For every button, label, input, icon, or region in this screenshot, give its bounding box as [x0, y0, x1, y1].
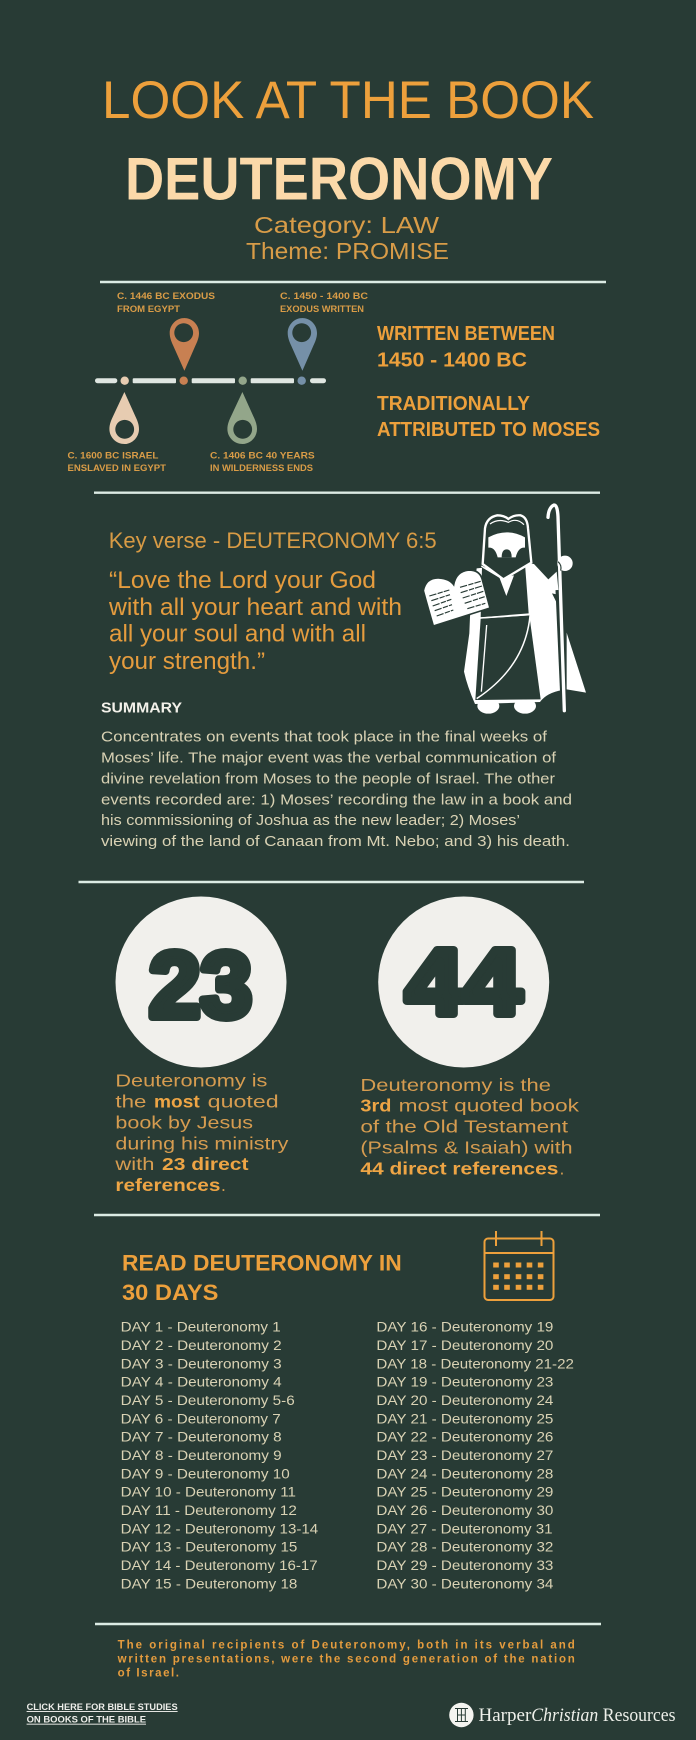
timeline dots	[120, 376, 306, 385]
text block: summary: Concentrates on events that took place in the final weeks of	[101, 730, 548, 746]
list: days 1 to 15: DAY 1 - Deuteronomy 1	[121, 1320, 281, 1335]
text block: authorship: WRITTEN BETWEEN	[377, 323, 555, 345]
label: 1406 BC	[210, 451, 315, 474]
list: days 16 to 30: DAY 24 - Deuteronomy 28	[376, 1466, 553, 1481]
list: days 16 to 30: DAY 26 - Deuteronomy 30	[376, 1503, 553, 1518]
text block: verse quote	[108, 567, 402, 675]
list: days 16 to 30: DAY 28 - Deuteronomy 32	[376, 1540, 553, 1555]
staff	[558, 590, 563, 695]
text block: 23 references: references	[115, 1175, 221, 1195]
text block: 44 references: 3rd	[360, 1096, 391, 1116]
label: 1446 BC: C. 1446 BC EXODUS	[117, 291, 215, 302]
text block: 23 references: Deuteronomy is	[115, 1071, 268, 1091]
list: days 16 to 30: DAY 21 - Deuteronomy 25	[376, 1411, 553, 1426]
subtitle: category and theme: Category: LAW	[254, 212, 440, 238]
text block: summary: viewing of the land of Canaan from Mt. Nebo; and 3) his death.	[101, 834, 570, 850]
text block: 23 references: 23 direct	[162, 1154, 249, 1174]
list: days 1 to 15: DAY 6 - Deuteronomy 7	[121, 1411, 281, 1426]
wordmark: Harper	[478, 1705, 532, 1726]
list: days 1 to 15: DAY 5 - Deuteronomy 5-6	[121, 1393, 295, 1408]
list: days 16 to 30: DAY 27 - Deuteronomy 31	[376, 1521, 553, 1536]
list: days 1 to 15: DAY 14 - Deuteronomy 16-17	[121, 1558, 318, 1573]
text block: 44 references: (Psalms & Isaiah) with	[360, 1137, 573, 1157]
text block: 44 references: most quoted book	[399, 1096, 579, 1116]
text block: 23 references: most	[154, 1092, 200, 1112]
panel: timeline	[68, 291, 368, 474]
head	[483, 515, 531, 579]
text block: summary	[101, 730, 572, 850]
list: days 1 to 15: DAY 15 - Deuteronomy 18	[121, 1576, 297, 1591]
heading: key verse: Key verse - DEUTERONOMY 6:5	[109, 528, 437, 553]
list: days 1 to 15: DAY 11 - Deuteronomy 12	[121, 1503, 297, 1518]
list: days 1 to 15: DAY 13 - Deuteronomy 15	[121, 1540, 297, 1555]
skirt	[475, 615, 541, 700]
list: days 1 to 15: DAY 3 - Deuteronomy 3	[121, 1356, 282, 1371]
text block: verse quote: with all your heart and with	[108, 594, 402, 621]
hand	[557, 556, 573, 571]
list: days 16 to 30: DAY 16 - Deuteronomy 19	[376, 1320, 553, 1335]
list: days 16 to 30: DAY 18 - Deuteronomy 21-22	[376, 1356, 574, 1371]
label: 1406 BC: C. 1406 BC 40 YEARS	[210, 451, 315, 462]
text block: original recipients: The original recipients of Deuteronomy, both in its verbal and	[118, 1639, 575, 1651]
text block: authorship: TRADITIONALLY	[377, 393, 531, 415]
text block: original recipients: of Israel.	[118, 1668, 179, 1680]
heading: reading plan: READ DEUTERONOMY IN	[122, 1251, 402, 1276]
text block: authorship: ATTRIBUTED TO MOSES	[377, 419, 600, 441]
list: days 16 to 30: DAY 23 - Deuteronomy 27	[376, 1448, 553, 1463]
wordmark: Resources	[603, 1705, 676, 1726]
stat: 23: 23	[149, 933, 252, 1037]
logo: HarperChristian Resources	[449, 1703, 676, 1727]
pin: exodus from egypt	[170, 318, 199, 371]
wordmark	[478, 1705, 676, 1726]
heading: book name: DEUTERONOMY	[125, 146, 553, 212]
list: days 1 to 15: DAY 9 - Deuteronomy 10	[121, 1466, 290, 1481]
tablets	[423, 570, 490, 626]
list: days 16 to 30: DAY 25 - Deuteronomy 29	[376, 1485, 553, 1500]
text block: authorship: 1450 - 1400 BC	[377, 350, 527, 372]
timeline bar	[95, 378, 326, 383]
pin: israel enslaved	[109, 392, 139, 444]
link: bible studies	[27, 1702, 178, 1726]
heading: reading plan: 30 DAYS	[122, 1280, 218, 1305]
text block: authorship	[377, 323, 600, 441]
text block: 23 references: with	[114, 1154, 154, 1174]
label: 1600 BC: C. 1600 BC ISRAEL	[68, 451, 159, 462]
text block: 23 references: .	[221, 1175, 226, 1195]
text block: original recipients: written presentations, were the second generation of the nation	[117, 1654, 575, 1666]
title: look at the book: LOOK AT THE BOOK	[102, 71, 594, 130]
link: bible studies: CLICK HERE FOR BIBLE STUDIES	[27, 1702, 178, 1713]
list: days 16 to 30: DAY 17 - Deuteronomy 20	[376, 1338, 553, 1353]
label: 1450-1400 BC: EXODUS WRITTEN	[280, 304, 364, 315]
list: days 1 to 15: DAY 7 - Deuteronomy 8	[121, 1430, 282, 1445]
label: 1406 BC: IN WILDERNESS ENDS	[210, 463, 313, 474]
link: bible studies: ON BOOKS OF THE BIBLE	[27, 1715, 146, 1726]
text block: 23 references: book by Jesus	[115, 1112, 253, 1132]
label: 1446 BC	[117, 291, 215, 315]
feet	[477, 698, 536, 714]
text block: verse quote: your strength.”	[109, 648, 265, 675]
stat: 44: 44	[406, 930, 522, 1034]
text block: summary: events recorded are: 1) Moses’ recording the law in a book and	[101, 792, 572, 808]
pin: exodus written	[288, 318, 317, 371]
list: days 16 to 30: DAY 19 - Deuteronomy 23	[376, 1375, 553, 1390]
text block: 44 references: Deuteronomy is the	[360, 1075, 551, 1095]
heading: reading plan	[122, 1251, 402, 1305]
subtitle: category and theme: Theme: PROMISE	[246, 238, 449, 264]
text block: original recipients	[117, 1639, 575, 1680]
text block: 44 references: 44 direct references	[360, 1158, 559, 1178]
cloak wedge	[567, 633, 586, 693]
text block: 44 references: of the Old Testament	[360, 1117, 568, 1137]
text block: verse quote: all your soul and with all	[109, 621, 366, 648]
label: 1600 BC	[68, 451, 166, 474]
list: days 1 to 15: DAY 10 - Deuteronomy 11	[121, 1485, 296, 1500]
text block: 44 references	[360, 1075, 579, 1178]
wordmark: Christian	[531, 1705, 598, 1726]
list: days 1 to 15: DAY 2 - Deuteronomy 2	[121, 1338, 282, 1353]
list: days 16 to 30	[376, 1320, 574, 1591]
list: days 16 to 30: DAY 29 - Deuteronomy 33	[376, 1558, 553, 1573]
stat: 23	[116, 896, 286, 1068]
text block: summary: Moses’ life. The major event was the verbal communication of	[101, 751, 557, 767]
list: days 16 to 30: DAY 22 - Deuteronomy 26	[376, 1430, 553, 1445]
tunic	[481, 564, 529, 617]
list: days 16 to 30: DAY 20 - Deuteronomy 24	[376, 1393, 554, 1408]
label: 1450-1400 BC: C. 1450 - 1400 BC	[280, 291, 368, 302]
text block: 44 references: .	[560, 1158, 564, 1178]
text block: summary: his commissioning of Joshua as the new leader; 2) Moses’	[101, 813, 520, 829]
text block: verse quote: “Love the Lord your God	[109, 567, 376, 594]
label: 1446 BC: FROM EGYPT	[117, 304, 180, 315]
icon: Moses with tablets and staff	[423, 505, 586, 714]
list: days 1 to 15: DAY 12 - Deuteronomy 13-14	[121, 1521, 319, 1536]
list: days 1 to 15: DAY 4 - Deuteronomy 4	[121, 1375, 282, 1390]
logo mark	[449, 1703, 474, 1727]
text block: 23 references	[114, 1071, 289, 1195]
heading: summary: SUMMARY	[101, 700, 182, 717]
stat: 44	[378, 896, 549, 1068]
text block: 23 references: the	[115, 1092, 146, 1112]
text block: 23 references: quoted	[208, 1092, 279, 1112]
list: days 16 to 30: DAY 30 - Deuteronomy 34	[376, 1576, 554, 1591]
text block: summary: divine revelation from Moses to the people of Israel. The other	[101, 771, 555, 787]
label: 1600 BC: ENSLAVED IN EGYPT	[68, 463, 166, 474]
list: days 1 to 15	[121, 1320, 319, 1591]
label: 1450-1400 BC	[280, 291, 368, 315]
subtitle: category and theme	[246, 212, 449, 264]
cloak	[464, 563, 563, 704]
list: days 1 to 15: DAY 8 - Deuteronomy 9	[121, 1448, 282, 1463]
pin: wilderness ends	[227, 392, 257, 444]
icon: calendar	[484, 1231, 554, 1300]
text block: 23 references: during his ministry	[115, 1133, 289, 1153]
